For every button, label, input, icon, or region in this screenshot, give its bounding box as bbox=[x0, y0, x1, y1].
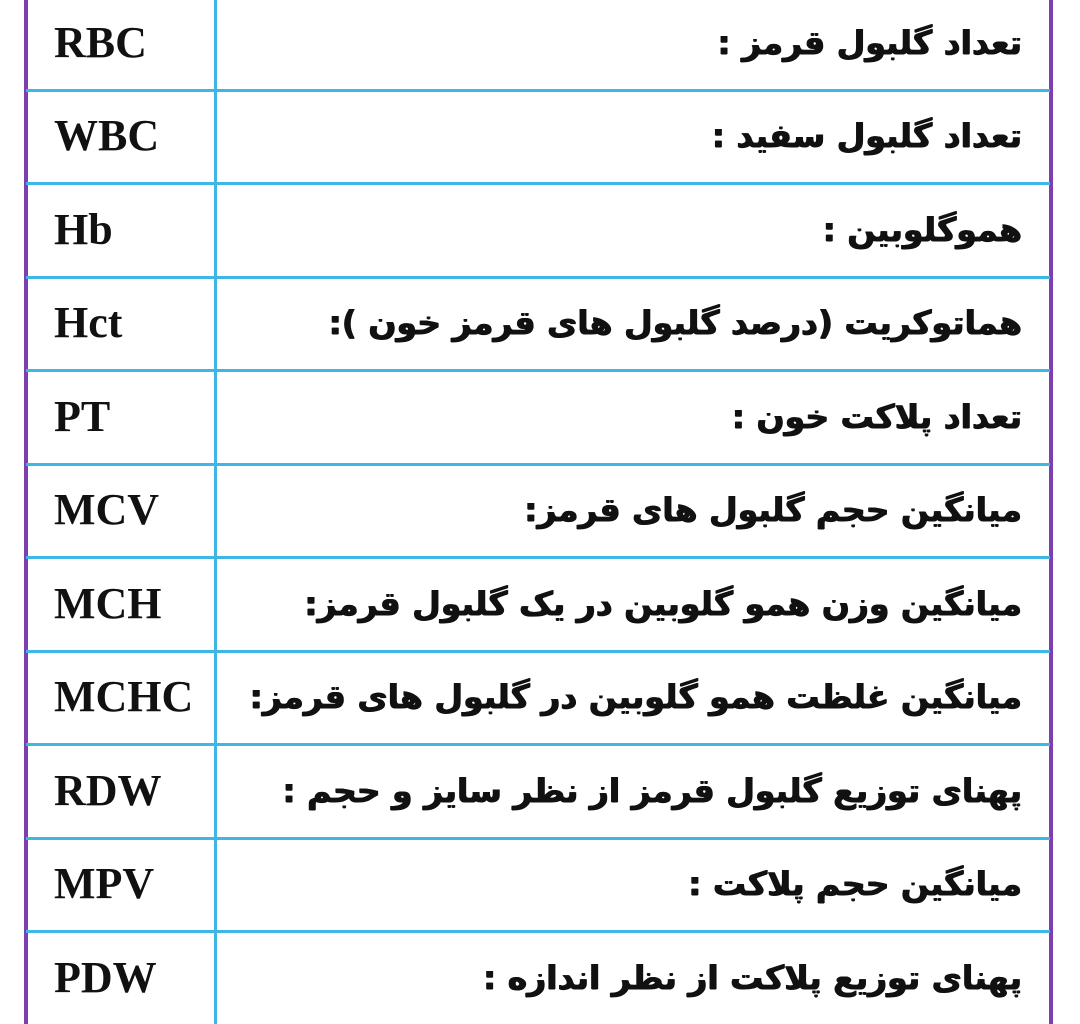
row: MCHC: MCHC bbox=[54, 672, 193, 721]
row: MCHC: میانگین غلظت همو گلوبین در گلبول های قرمز: bbox=[250, 677, 1022, 716]
row: MCV: MCV bbox=[54, 485, 159, 534]
row: MCV: میانگین حجم گلبول های قرمز: bbox=[524, 490, 1022, 529]
row: MCH: میانگین وزن همو گلوبین در یک گلبول قرمز: bbox=[304, 584, 1022, 623]
row: MCH: MCH bbox=[54, 579, 162, 628]
row: Hct: Hct bbox=[54, 298, 122, 347]
row: PDW bbox=[54, 953, 1022, 1002]
row: MPV: میانگین حجم پلاکت : bbox=[688, 864, 1022, 903]
row: MPV bbox=[54, 859, 1022, 908]
row: PDW: PDW bbox=[54, 953, 157, 1002]
row: RDW: پهنای توزیع گلبول قرمز از نظر سایز و حجم : bbox=[282, 771, 1022, 810]
row: MCV bbox=[54, 485, 1022, 534]
row: RBC bbox=[54, 18, 1022, 67]
row: RBC: تعداد گلبول قرمز : bbox=[717, 23, 1022, 62]
row: RDW bbox=[54, 766, 1022, 815]
row: MCH bbox=[54, 579, 1022, 628]
row: MPV: MPV bbox=[54, 859, 154, 908]
row: Hb bbox=[54, 205, 1022, 254]
row: Hb: Hb bbox=[54, 205, 113, 254]
row: PT: PT bbox=[54, 392, 110, 441]
row: PT bbox=[54, 392, 1022, 441]
row: WBC: تعداد گلبول سفید : bbox=[712, 116, 1022, 155]
row: Hct: هماتوکریت (درصد گلبول های قرمز خون ): bbox=[329, 303, 1022, 342]
row: PT: تعداد پلاکت خون : bbox=[732, 397, 1022, 436]
row: WBC: WBC bbox=[54, 111, 159, 160]
row: Hct bbox=[54, 298, 1022, 347]
row: MCHC bbox=[54, 672, 1022, 721]
row: RDW: RDW bbox=[54, 766, 162, 815]
row: RBC: RBC bbox=[54, 18, 147, 67]
row: Hb: هموگلوبین : bbox=[823, 210, 1022, 249]
row: PDW: پهنای توزیع پلاکت از نظر اندازه : bbox=[483, 958, 1022, 997]
row: WBC bbox=[54, 111, 1022, 160]
